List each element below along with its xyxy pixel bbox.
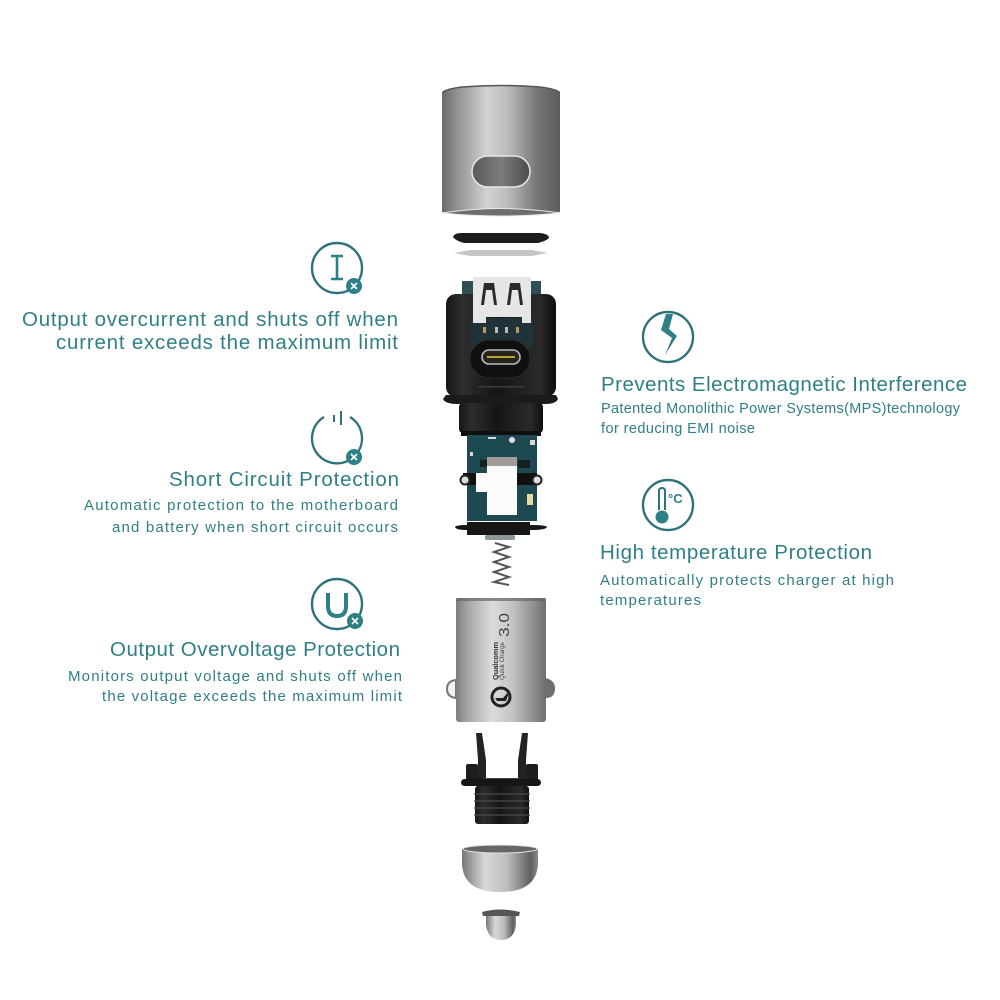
text: overcurrent description: Output overcurrent and shuts off when [22,308,398,331]
text: electromagnetic interference [601,373,967,437]
part: spring [494,543,509,585]
part: black ring [453,233,549,243]
icon: overcurrent I [312,243,362,294]
text: high temperature protection: Automatically protects charger at high [600,572,894,589]
part: circuit board [460,435,542,521]
text: overcurrent description [22,308,398,354]
text: overvoltage protection: the voltage exceeds the maximum limit [102,688,403,705]
text: short circuit protection [84,468,399,536]
icon: short circuit power [312,411,362,465]
label: Quick Charge 3.0: Qualcomm [493,642,500,680]
part: black body with USB ports [443,277,558,436]
text: electromagnetic interference: Patented Monolithic Power Systems(MPS)technology [601,401,961,417]
icon: thermometer [643,480,693,530]
text: high temperature protection: High temperature Protection [600,541,872,564]
part: metal tip [482,910,520,940]
text: overvoltage protection: Monitors output voltage and shuts off when [68,668,402,685]
icon: thermometer: °C [668,491,683,506]
part: clear ring [454,250,548,256]
text: high temperature protection: temperatures [600,592,701,609]
text: overcurrent description: current exceeds the maximum limit [56,331,398,354]
part: black threaded plastic base [461,733,541,824]
text: high temperature protection [600,541,894,609]
text: overvoltage protection: Output Overvoltage Protection [110,638,400,661]
part: black mounting plate [455,522,547,540]
part: metal body with Qualcomm branding [447,598,555,722]
label: Quick Charge 3.0 [493,613,513,680]
label: Quick Charge 3.0: Quick Charge [499,642,506,680]
label: Quick Charge 3.0: 3.0 [496,613,513,637]
text: overvoltage protection [68,638,403,705]
part: metal cup [462,845,538,892]
icon: lightning bolt [643,312,693,362]
text: short circuit protection: Automatic protection to the motherboard [84,497,398,514]
icon: overvoltage U [312,579,363,629]
text: electromagnetic interference: for reducing EMI noise [601,421,755,437]
text: short circuit protection: Short Circuit Protection [169,468,399,491]
product: exploded charger [442,86,560,940]
text: electromagnetic interference: Prevents Electromagnetic Interference [601,373,967,396]
text: short circuit protection: and battery when short circuit occurs [112,519,398,536]
part: metal top cap [442,86,560,216]
logo: Quick Charge [492,688,510,706]
